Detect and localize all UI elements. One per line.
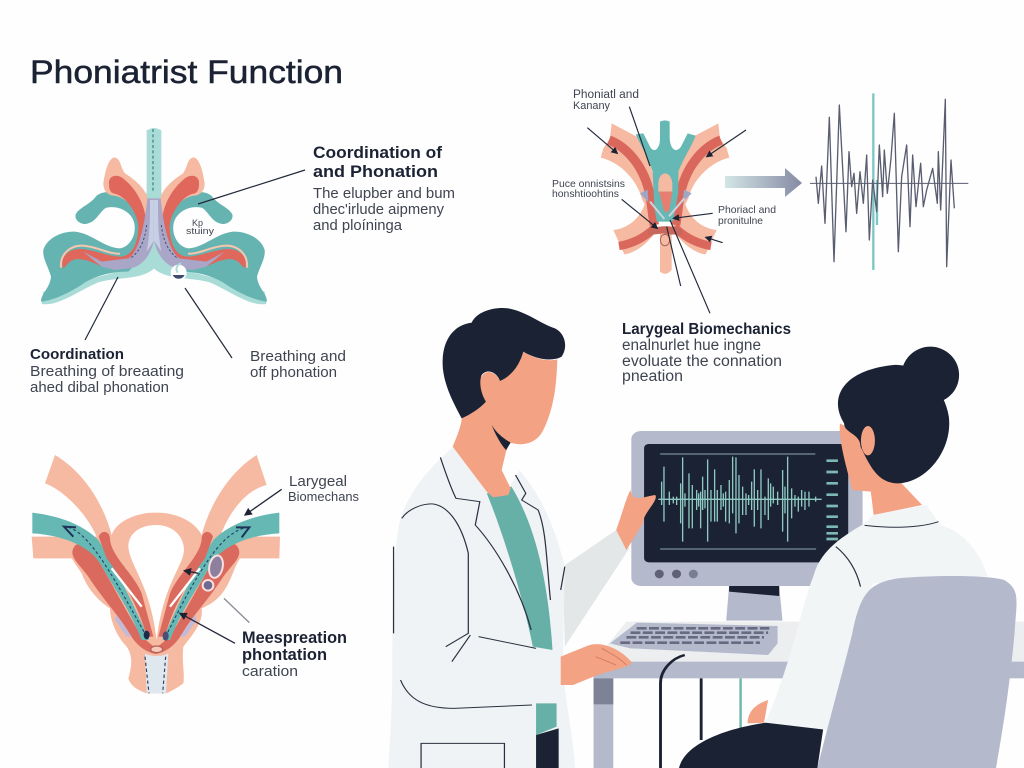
diagram: bottom-left larynx — [32, 455, 282, 693]
doctor coat — [388, 447, 575, 768]
text: puce onnistsins — [552, 178, 625, 200]
patient trousers — [679, 723, 824, 768]
laryngeal knot — [648, 226, 682, 235]
central opening — [128, 525, 184, 640]
text: small cavity label: stuiny — [186, 226, 215, 236]
right half of larynx — [154, 128, 267, 304]
text: coordination of and phonation: and Phonation — [313, 162, 438, 181]
text: phoriacl and — [718, 204, 776, 227]
airflow dashes — [68, 527, 243, 637]
chair — [817, 576, 1017, 768]
monitor — [631, 431, 863, 586]
purple wings — [640, 190, 692, 202]
doctor — [388, 308, 656, 768]
title: Phoniatrist Function — [30, 54, 343, 90]
doctor coat lines — [394, 457, 565, 768]
diagram: top-right larynx — [601, 120, 729, 274]
text: puce onnistsins: Puce onnistsins — [552, 178, 625, 190]
doctor head — [443, 308, 565, 497]
patient hand — [748, 700, 768, 723]
scene: clinicians at monitor — [388, 308, 1024, 768]
text: coordination of and phonation: and ploíninga — [313, 217, 403, 234]
text: coordination: Coordination — [30, 346, 124, 363]
patient — [679, 347, 1017, 768]
waveform baseline — [810, 182, 968, 185]
left bands — [601, 123, 658, 254]
text: laryngeal biomechanics — [622, 321, 791, 385]
text: coordination: Breathing of breaating — [30, 363, 184, 380]
text: larygeal biomechans: Biomechans — [288, 490, 359, 504]
pointer lines: top-right larynx — [587, 107, 746, 313]
center tissue — [658, 173, 672, 192]
text: meespreation phontation: phontation — [242, 646, 327, 664]
waveform trace — [816, 99, 954, 267]
text: breathing and off phonation: Breathing and — [250, 348, 346, 365]
patient hair — [838, 365, 949, 483]
text: phoriacl and: pronitulne — [718, 215, 763, 227]
doctor jaw shadow — [492, 425, 511, 450]
text: laryngeal biomechanics: Larygeal Biomechanics — [622, 321, 791, 338]
desk — [594, 622, 1024, 768]
text: coordination of and phonation — [313, 143, 455, 234]
lower stem — [660, 228, 672, 274]
text: coordination of and phonation: Coordination of — [313, 143, 442, 162]
peach tissue — [32, 455, 280, 693]
text: phoriacl and: Phoriacl and — [718, 204, 776, 216]
text: laryngeal biomechanics: pneation — [622, 368, 683, 385]
text: meespreation phontation: Meespreation — [242, 629, 347, 647]
doctor lower hand — [561, 644, 632, 685]
text: breathing and off phonation: off phonation — [250, 364, 337, 381]
text: small cavity label — [186, 218, 215, 236]
doctor trousers — [536, 728, 559, 768]
monitor buttons — [655, 570, 664, 578]
pointer lines: top-left larynx — [85, 170, 305, 358]
white gaps — [112, 568, 200, 607]
text: phoniatl and kanany: Phoniatl and — [573, 89, 639, 101]
ring — [660, 234, 670, 246]
red muscle edges — [648, 192, 682, 225]
patient ear — [861, 426, 875, 455]
monitor stand — [726, 586, 782, 621]
text: breathing and off phonation — [250, 348, 346, 381]
left muscle and airway — [32, 513, 156, 654]
keyboard — [610, 623, 778, 655]
arrow: gradient to waveform — [725, 168, 802, 197]
airflow arrowheads — [64, 527, 249, 537]
text: laryngeal biomechanics: enalnurlet hue ingne — [622, 337, 761, 354]
text: coordination of and phonation: The elupber and bum — [313, 185, 455, 202]
teal center spike — [873, 93, 877, 270]
small valve icon — [171, 263, 187, 281]
doctor teal shirt — [487, 487, 552, 650]
right bands — [672, 123, 729, 254]
monitor waveform — [658, 457, 822, 542]
airway dashed line — [151, 129, 155, 192]
text: phoniatl and kanany — [573, 89, 639, 112]
monitor readout ticks — [826, 461, 838, 539]
text: meespreation phontation: caration — [242, 663, 298, 680]
lower windpipe — [145, 653, 168, 693]
patient neck and face — [840, 423, 922, 515]
text: laryngeal biomechanics: evoluate the connation — [622, 353, 782, 370]
text: larygeal biomechans — [288, 474, 359, 504]
doctor hair — [443, 308, 565, 418]
text: coordination: ahed dibal phonation — [30, 379, 169, 396]
patient shirt — [765, 505, 988, 730]
text: phoniatl and kanany: Kanany — [573, 100, 610, 112]
doctor arm — [563, 530, 629, 647]
chart: voice waveform — [810, 93, 968, 270]
diagram: top-left larynx — [41, 128, 267, 304]
pointer lines — [180, 489, 282, 643]
doctor face and neck — [453, 352, 557, 497]
joint icon — [203, 554, 225, 591]
text: small cavity label: Kp — [192, 218, 203, 228]
doctor raised hand — [616, 490, 656, 550]
vocal knot — [151, 646, 163, 653]
text: puce onnistsins: honshtioohtins — [552, 188, 619, 200]
text: coordination of and phonation: dhec'irlude aipmeny — [313, 201, 444, 218]
text: larygeal biomechans: Larygeal — [289, 474, 347, 490]
purple side tissue — [115, 615, 197, 637]
text: meespreation phontation — [242, 629, 347, 680]
right muscle and airway — [156, 513, 279, 654]
left half of larynx — [41, 128, 154, 304]
cables — [661, 655, 701, 768]
patient bun — [902, 347, 959, 403]
text: coordination — [30, 346, 184, 396]
teal airway — [636, 120, 696, 222]
